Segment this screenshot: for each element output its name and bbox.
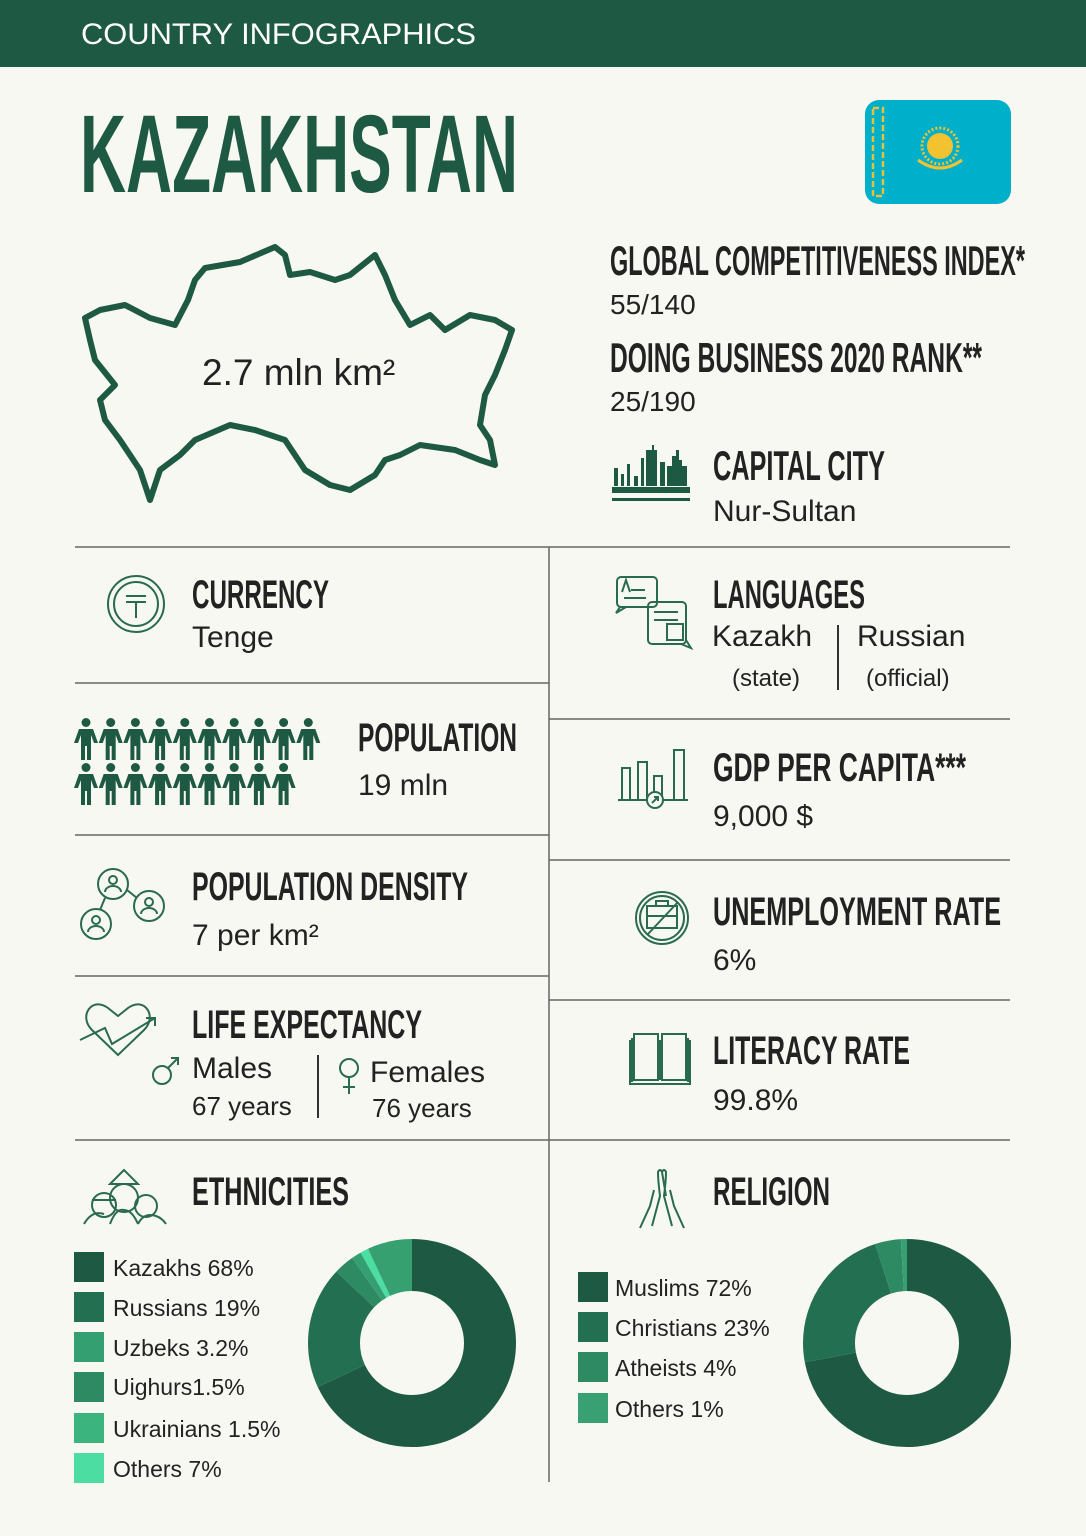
legend: ethnicities: Kazakhs 68% [113,1255,254,1281]
donut: ethnicities [334,1265,490,1421]
global competitiveness [610,237,1025,320]
legend: ethnicities: Uzbeks 3.2% [113,1335,249,1361]
panel: population density [81,865,468,952]
capital city [612,442,885,528]
legend: religion: Atheists 4% [615,1355,736,1381]
capital city: Nur-Sultan [713,495,856,528]
panel: currency [108,573,329,654]
doing business: 25/190 [610,386,696,417]
panel: languages: Russian [857,620,965,653]
panel: population [74,716,517,805]
panel: languages [616,573,965,692]
panel: life expectancy: 76 years [372,1093,472,1123]
panel: religion: RELIGION [713,1170,830,1214]
panel: population density: POPULATION DENSITY [192,865,468,909]
grid lines [75,547,1010,1482]
panel: languages: (official) [866,665,950,692]
map: 2.7 mln km² [202,352,395,393]
panel: languages: (state) [732,665,800,692]
panel: languages: Kazakh [712,620,812,653]
panel: unemployment rate [636,890,1001,977]
panel: ethnicities: ETHNICITIES [192,1170,349,1214]
legend: ethnicities: Ukrainians 1.5% [113,1416,280,1442]
panel: currency: CURRENCY [192,573,329,617]
panel: life expectancy: Males [192,1052,272,1085]
icon: flag [865,100,1011,204]
panel: literacy rate: LITERACY RATE [713,1029,910,1073]
panel: population: 19 mln [358,769,448,802]
panel: life expectancy: 67 years [192,1091,292,1121]
panel: population: POPULATION [358,716,517,760]
panel: life expectancy: LIFE EXPECTANCY [192,1003,422,1047]
global competitiveness: 55/140 [610,289,696,320]
panel: currency: Tenge [192,621,274,654]
panel: gdp per capita: 9,000 $ [713,800,813,833]
doing business [610,334,982,417]
panel: languages: LANGUAGES [713,573,865,617]
legend: religion [578,1272,770,1423]
panel: unemployment rate: 6% [713,944,756,977]
panel: life expectancy: Females [370,1056,485,1089]
legend: religion: Others 1% [615,1396,724,1422]
header bar: COUNTRY INFOGRAPHICS [81,18,476,51]
panel: religion [578,1170,985,1423]
map [85,247,512,500]
title: KAZAKHSTAN [80,93,518,216]
panel: gdp per capita [618,746,966,833]
legend: ethnicities: Uighurs1.5% [113,1374,245,1400]
header bar [0,0,1086,67]
panel: literacy rate: 99.8% [713,1084,798,1117]
legend: ethnicities [74,1252,280,1483]
panel: population density: 7 per km² [192,919,319,952]
donut: religion [829,1265,985,1421]
legend: religion: Christians 23% [615,1315,770,1341]
panel: literacy rate [630,1029,910,1117]
legend: ethnicities: Others 7% [113,1456,222,1482]
legend: religion: Muslims 72% [615,1275,752,1301]
panel: life expectancy [80,1003,485,1123]
capital city: CAPITAL CITY [713,442,885,489]
panel: gdp per capita: GDP PER CAPITA*** [713,746,966,790]
legend: ethnicities: Russians 19% [113,1295,260,1321]
panel: ethnicities [74,1170,490,1483]
